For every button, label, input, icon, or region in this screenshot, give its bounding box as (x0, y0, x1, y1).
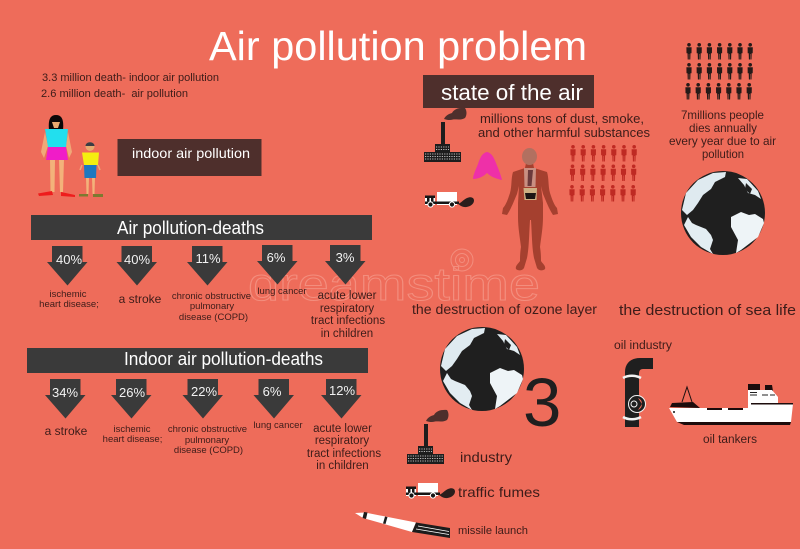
icon: factory with smoke (424, 108, 466, 162)
pictogram: black people (685, 43, 753, 100)
arrow 3% respiratory infections: 3% (336, 250, 355, 265)
label: oil industry: oil industry (614, 340, 672, 352)
text: 7 million people: pollution (702, 147, 744, 161)
arrow 12% respiratory infections (307, 379, 381, 472)
icon: woman and child (38, 115, 103, 197)
arrow 34% stroke: a stroke (45, 424, 88, 438)
icon: lungs (473, 152, 502, 180)
panel: air pollution deaths (31, 215, 385, 340)
text: dust and smoke: millions tons of dust, smoke, (480, 111, 644, 126)
label: missile launch: missile launch (458, 525, 528, 537)
arrow 12% respiratory infections: in children (316, 460, 369, 472)
heading (31, 215, 372, 240)
heading box: state of the air: state of the air (441, 80, 583, 105)
text: 7 million people (669, 108, 776, 161)
text: 7 million people: every year due to air (669, 134, 776, 148)
arrow 22% COPD: disease (COPD) (174, 445, 243, 456)
arrow 3% respiratory infections: acute lower (318, 290, 377, 302)
arrow 22% COPD: 22% (191, 384, 217, 399)
heading box: state of the air (423, 75, 594, 108)
icon: globe top (681, 171, 765, 255)
arrow 22% COPD (168, 379, 247, 456)
arrow 40% ischemic heart disease: ischemic (50, 289, 87, 300)
child (79, 142, 103, 197)
heading: destruction of ozone layer: the destruction of ozone layer (412, 302, 598, 317)
arrow 12% respiratory infections: respiratory (315, 435, 369, 447)
icon: truck with fumes (425, 192, 474, 207)
death totals text: 2.6 million death- air pollution (41, 88, 188, 100)
arrow 40% ischemic heart disease: heart disease; (39, 299, 99, 310)
arrow 6% lung cancer: lung cancer (257, 286, 307, 297)
arrow 40% ischemic heart disease (39, 246, 99, 310)
icon: missile (355, 512, 450, 538)
arrow 3% respiratory infections: in children (321, 328, 373, 340)
heading box: indoor air pollution (118, 139, 262, 176)
arrow 6% lung cancer (257, 245, 307, 297)
arrow 40% stroke: 40% (124, 252, 150, 267)
arrow 26% ischemic heart disease: heart disease; (103, 434, 162, 445)
death totals text (41, 72, 219, 100)
heading: destruction of sea life: the destruction of sea life (619, 303, 796, 319)
arrow 11% COPD: chronic obstructive (172, 291, 251, 302)
arrow 11% COPD: disease (COPD) (179, 312, 248, 323)
heading (27, 348, 368, 373)
arrow 11% COPD: 11% (195, 251, 221, 266)
label: oil tankers: oil tankers (703, 434, 757, 446)
arrow 34% stroke (45, 379, 88, 438)
arrow 11% COPD (172, 246, 251, 323)
icon: factory with smoke lower (407, 410, 448, 464)
heading: Indoor air pollution-deaths (124, 349, 323, 369)
arrow 26% ischemic heart disease: ischemic (114, 424, 151, 435)
label: industry: industry (460, 449, 512, 465)
arrow 3% respiratory infections (311, 245, 385, 340)
arrow 26% ischemic heart disease (103, 379, 162, 445)
text: dust and smoke (478, 111, 650, 140)
icon: oil tanker (669, 384, 793, 425)
arrow 22% COPD: chronic obstructive (168, 424, 247, 435)
arrow 12% respiratory infections: 12% (329, 383, 355, 398)
arrow 40% stroke (116, 246, 162, 306)
text: 7 million people: dies annually (689, 121, 757, 135)
arrow 6% lung cancer: lung cancer (253, 420, 303, 431)
arrow 12% respiratory infections: tract infections (307, 448, 381, 460)
woman (38, 115, 75, 197)
label: traffic fumes: traffic fumes (458, 484, 540, 500)
arrow 34% stroke: 34% (52, 385, 78, 400)
arrow 3% respiratory infections: respiratory (320, 303, 374, 315)
arrow 40% stroke: a stroke (119, 292, 162, 306)
arrow 6% lung cancer (253, 379, 303, 431)
arrow 11% COPD: pulmonary (190, 301, 234, 312)
arrow 3% respiratory infections: tract infections (311, 315, 385, 327)
pictogram: red people (569, 145, 637, 202)
arrow 12% respiratory infections: acute lower (313, 423, 372, 435)
text: 7 million people: 7millions people (681, 108, 764, 122)
numeral 3 of O3: 3 (523, 364, 561, 441)
death totals text: 3.3 million death- indoor air pollution (42, 72, 219, 84)
title: Air pollution problem (209, 23, 587, 69)
arrow 26% ischemic heart disease: 26% (119, 385, 145, 400)
icon: truck lower (406, 483, 455, 498)
arrow 6% lung cancer: 6% (263, 384, 282, 399)
watermark: dreamstime (248, 258, 540, 310)
text: dust and smoke: and other harmful substances (478, 125, 650, 140)
arrow 22% COPD: pulmonary (185, 435, 229, 446)
icon: human body (502, 148, 558, 270)
heading: Air pollution-deaths (117, 218, 264, 238)
panel: indoor air pollution deaths (27, 348, 381, 472)
arrow 6% lung cancer: 6% (267, 250, 286, 265)
heading box: indoor air pollution: indoor air pollution (132, 145, 250, 161)
arrow 40% ischemic heart disease: 40% (56, 252, 82, 267)
icon: ozone globe (440, 327, 524, 411)
icon: oil pipe (623, 358, 653, 427)
